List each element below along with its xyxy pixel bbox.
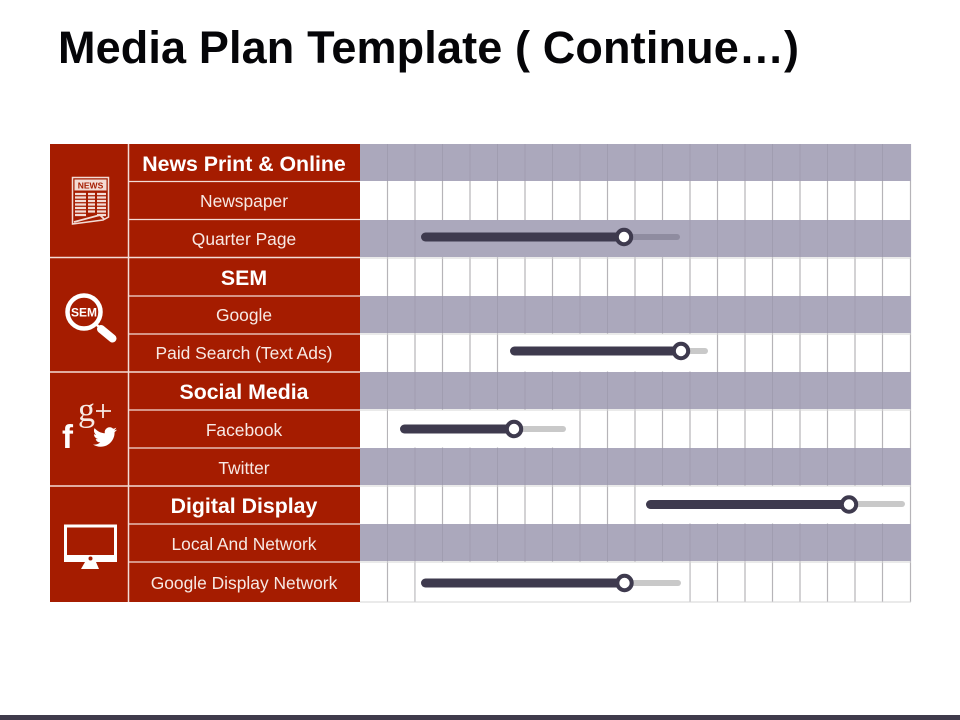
icon: desktop monitor: [64, 524, 117, 569]
icon: SEM magnifier: [68, 296, 112, 338]
bar: Digital Display: [646, 497, 905, 512]
icon: newspaper: NEWS: [78, 180, 104, 190]
icon: social media: f: [62, 418, 74, 455]
heading: Social Media: Social Media: [179, 380, 309, 404]
icon: newspaper: [72, 178, 108, 224]
bar: Google Display Network: [421, 576, 681, 590]
heading: Digital Display: Digital Display: [171, 494, 318, 518]
icon: social media: [62, 392, 117, 455]
panel: red channel table: [50, 144, 360, 602]
heading: SEM: SEM: [221, 266, 267, 290]
label: Twitter: Twitter: [218, 458, 270, 478]
footer bar: [0, 715, 960, 720]
label: Google: Google: [216, 305, 272, 325]
title: Media Plan Template ( Continue…): [58, 22, 799, 73]
label: Local And Network: Local And Network: [171, 534, 317, 554]
bar: Paid Search: [510, 344, 708, 358]
bar: Quarter Page: [421, 230, 680, 244]
heading: News Print & Online: News Print & Online: [142, 152, 346, 176]
icon: social media: g: [78, 392, 95, 429]
gantt grid: [360, 144, 911, 602]
label: Quarter Page: Quarter Page: [192, 229, 296, 249]
label: Google Display Network: Google Display Network: [151, 573, 338, 593]
label: Newspaper: Newspaper: [200, 191, 288, 211]
bar: Facebook: [400, 422, 566, 436]
label: Paid Search: Paid Search (Text Ads): [156, 343, 332, 363]
label: Facebook: Facebook: [206, 420, 282, 440]
icon: SEM magnifier: SEM: [71, 306, 97, 320]
